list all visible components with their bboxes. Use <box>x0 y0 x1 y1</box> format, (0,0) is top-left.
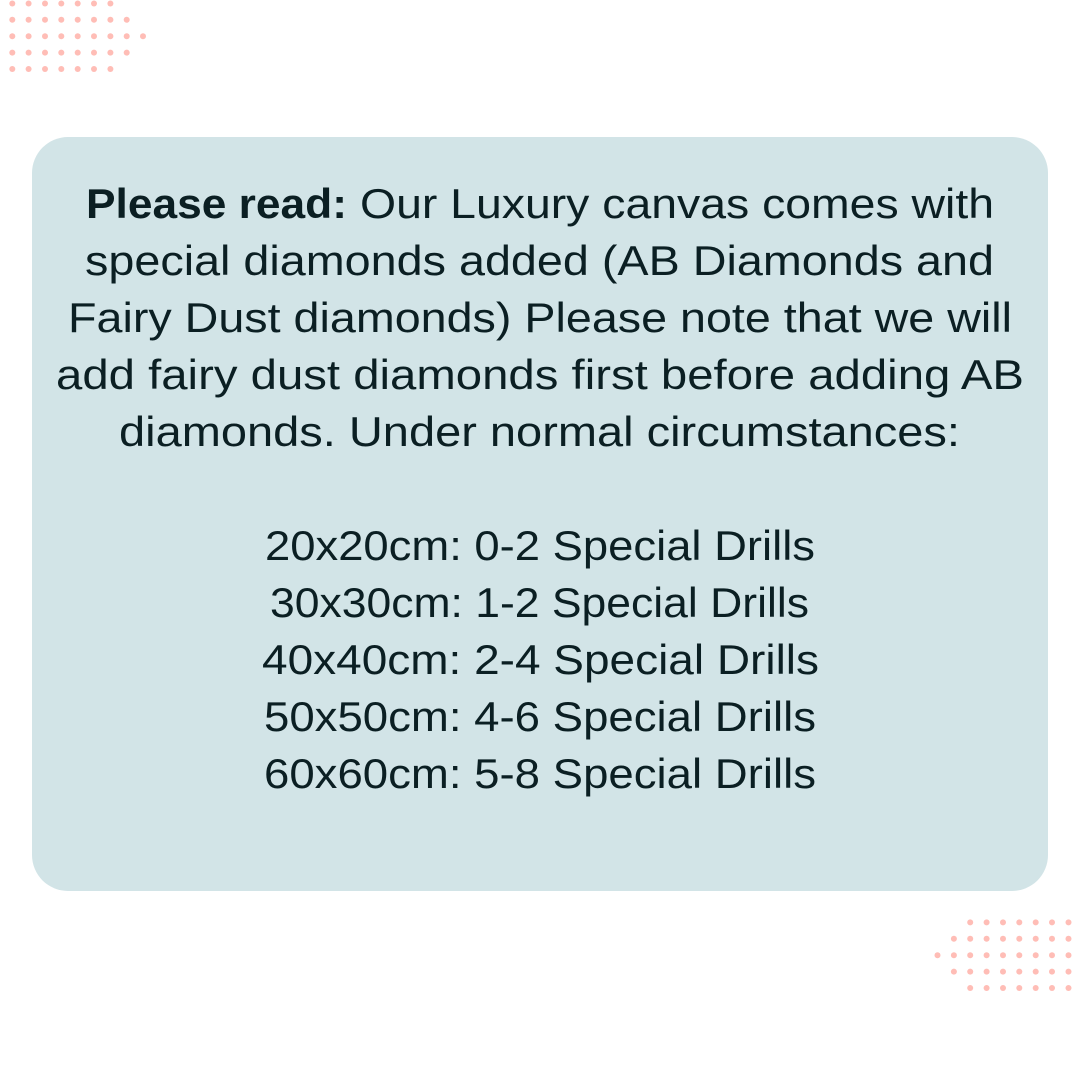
text block: please read notice: special diamonds added (AB Diamonds and <box>85 237 994 284</box>
dot pattern: bottom right <box>934 919 1072 991</box>
text block: please read notice: diamonds. Under normal circumstances: <box>119 408 960 455</box>
text block: special drills by size: 40x40cm: 2-4 Special Drills <box>262 636 819 683</box>
text block: please read notice: Our Luxury canvas comes with <box>360 180 994 227</box>
text block: special drills by size: 20x20cm: 0-2 Special Drills <box>265 522 815 569</box>
dot pattern: top left <box>9 0 146 72</box>
text block: special drills by size: 30x30cm: 1-2 Special Drills <box>270 579 809 626</box>
text block: special drills by size <box>262 522 819 797</box>
text block: please read notice <box>56 180 1024 455</box>
text block: special drills by size: 50x50cm: 4-6 Special Drills <box>264 693 816 740</box>
panel background <box>32 137 1048 891</box>
text block: special drills by size: 60x60cm: 5-8 Special Drills <box>264 750 816 797</box>
text block: please read notice: Fairy Dust diamonds) Please note that we will <box>68 294 1012 341</box>
text block: please read notice: add fairy dust diamonds first before adding AB <box>56 351 1024 398</box>
panel: notice card <box>32 137 1048 891</box>
text block: please read notice: Please read: <box>86 180 347 227</box>
